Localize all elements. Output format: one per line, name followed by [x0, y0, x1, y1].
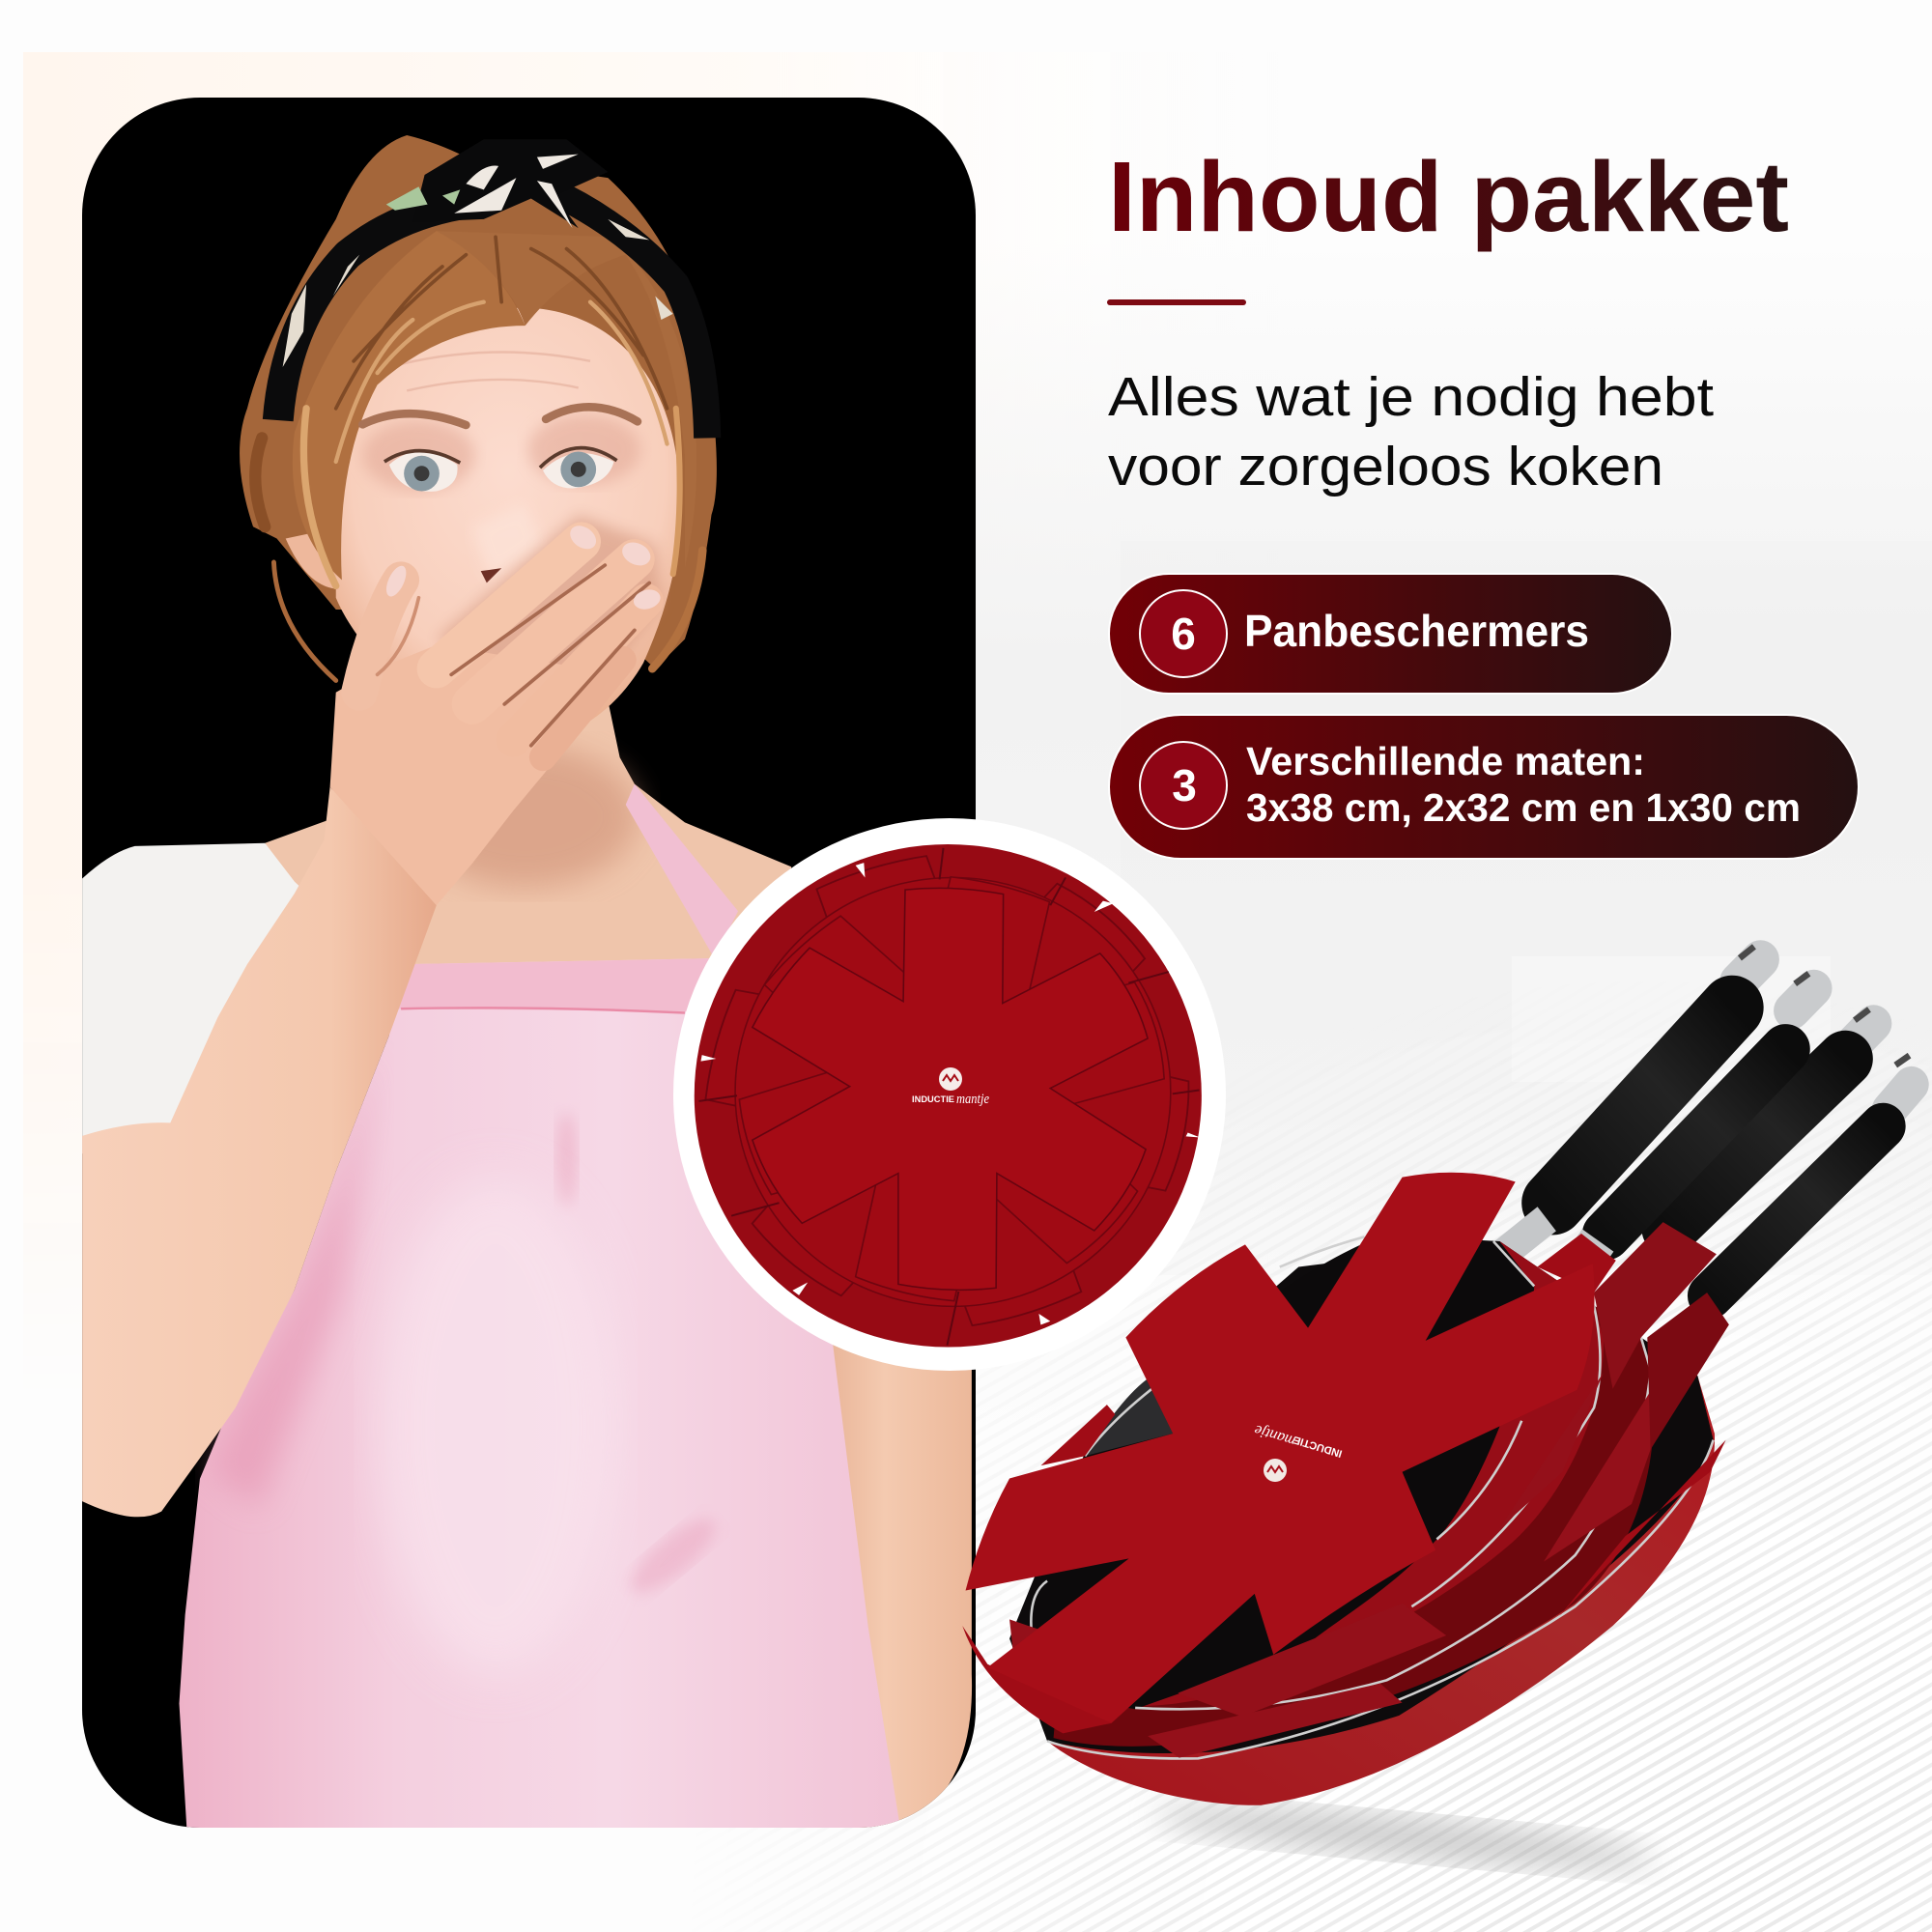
second pan body [1054, 1241, 1654, 1747]
headband [278, 139, 707, 438]
back hair [240, 135, 717, 668]
ear [286, 533, 336, 589]
face shading [362, 352, 640, 580]
product: stacked pans with felt protectors [962, 947, 1912, 1881]
dark slits [698, 848, 1199, 1346]
felt strips between pans [962, 1222, 1729, 1758]
hand shadow on face [437, 511, 665, 665]
left eye [384, 451, 460, 492]
middle disc [735, 877, 1171, 1306]
third pan body [1072, 1241, 1604, 1706]
large star [648, 793, 1249, 1388]
outer felt disc [695, 844, 1202, 1347]
label: 3x38 cm, 2x32 cm en 1x30 cm [1246, 785, 1801, 830]
label: Panbeschermers [1244, 606, 1589, 656]
nose shading [481, 568, 501, 582]
number circle 3: 3 [1172, 760, 1197, 810]
subtitle: voor zorgeloos koken [1108, 436, 1663, 497]
pan rims [1031, 1236, 1714, 1758]
panel: photo of shocked woman [82, 98, 976, 1831]
number circle 6 [1140, 590, 1227, 677]
subtitle [1108, 366, 1714, 497]
felt logo on protector: INDUCTIE [1293, 1434, 1344, 1460]
felt logo: INDUCTIE [912, 1094, 954, 1104]
right eye [540, 448, 617, 488]
fringe hair [255, 231, 702, 680]
number circle 3 [1140, 742, 1227, 829]
large red pan body [1047, 1376, 1715, 1805]
felt logo on protector: mantje [1253, 1421, 1297, 1449]
felt logo [912, 1067, 989, 1107]
divider rule [1107, 299, 1246, 305]
eyebrows [362, 407, 638, 425]
top star [753, 888, 1148, 1290]
inset circle: stacked felt protectors [648, 793, 1249, 1388]
number circle 6: 6 [1171, 609, 1196, 659]
face [336, 308, 680, 740]
badge: 3 Verschillende maten [1109, 715, 1859, 859]
badge: 6 Panbeschermers [1109, 574, 1672, 694]
pan shadow [1153, 1793, 1658, 1881]
disc notches [700, 863, 1200, 1325]
felt logo on protector [1253, 1421, 1344, 1482]
hand [330, 521, 663, 905]
large felt protector [966, 1173, 1595, 1723]
subtitle: Alles wat je nodig hebt [1108, 366, 1714, 428]
raised arm [82, 787, 437, 1517]
label: Verschillende maten: [1246, 739, 1645, 783]
chest and neck [265, 706, 792, 964]
top pan interior [1029, 1235, 1534, 1709]
right arm [833, 1345, 972, 1828]
middle star [706, 843, 1198, 1335]
neck shadow [412, 746, 638, 888]
pan handles [1503, 947, 1912, 1295]
felt logo: mantje [956, 1092, 989, 1107]
large pan interior [1009, 1241, 1714, 1753]
white shirt [82, 842, 299, 1153]
label [1246, 739, 1801, 830]
title: Inhoud pakket [1108, 141, 1789, 252]
top pan grey sheen [1085, 1370, 1173, 1456]
apron [180, 784, 900, 1831]
